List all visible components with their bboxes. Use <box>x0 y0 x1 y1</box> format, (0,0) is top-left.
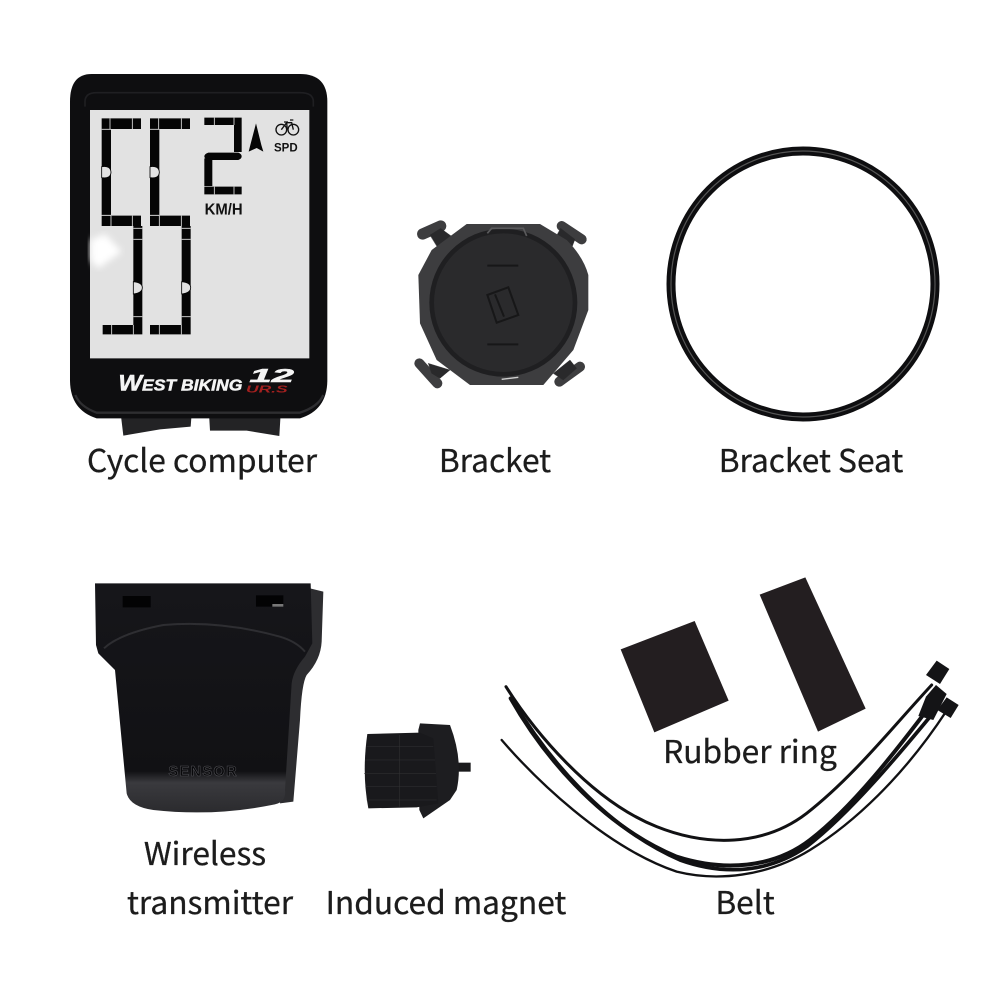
transmitter body <box>95 583 312 812</box>
label: wireless transmitter: Wireless <box>144 829 266 875</box>
label: wireless transmitter: transmitter <box>127 878 294 924</box>
magnet screw <box>458 763 471 772</box>
label: induced magnet: Induced magnet <box>326 878 566 924</box>
bracket centre marks <box>487 266 518 344</box>
SPD label: SPD <box>274 141 298 155</box>
magnet cap <box>418 723 459 818</box>
rubber rings and belt <box>502 577 959 876</box>
unit label: KM/H <box>205 201 243 218</box>
tie heads <box>918 661 959 720</box>
brand strip: UR.S <box>246 384 288 395</box>
mounting tabs <box>121 413 281 436</box>
bracket body <box>418 224 588 385</box>
wireless transmitter <box>95 583 323 812</box>
cable ties <box>502 685 946 876</box>
screen glare <box>91 234 122 268</box>
cycle computer device <box>70 74 327 436</box>
digit segment ovals <box>102 166 191 294</box>
bracket seat ring <box>671 151 935 417</box>
bracket <box>418 224 588 385</box>
label: belt: Belt <box>715 878 775 924</box>
device case <box>70 74 327 418</box>
bike icon <box>276 120 299 135</box>
label: bracket: Bracket <box>439 436 551 482</box>
magnet knurled barrel <box>365 733 438 808</box>
body highlight <box>104 624 305 652</box>
clip slots <box>123 595 283 607</box>
label: cycle computer: Cycle computer <box>87 436 318 482</box>
SENSOR embossed text: SENSOR <box>168 764 237 780</box>
LCD screen <box>90 110 309 358</box>
brand strip: 12 <box>249 365 295 386</box>
label: wireless transmitter <box>127 829 294 924</box>
brand strip <box>118 365 295 396</box>
label: rubber ring: Rubber ring <box>663 727 837 773</box>
bracket arms <box>419 226 582 383</box>
transmitter side clip <box>280 588 323 803</box>
label: bracket seat: Bracket Seat <box>719 436 903 482</box>
induced magnet <box>364 723 471 818</box>
brand strip: WEST BIKING <box>118 371 242 396</box>
up arrow <box>249 123 263 152</box>
large speed digits <box>102 118 191 334</box>
small digit <box>204 118 242 194</box>
rubber ring square <box>621 621 729 732</box>
segment gaps <box>102 118 191 334</box>
rubber ring long <box>760 577 866 732</box>
